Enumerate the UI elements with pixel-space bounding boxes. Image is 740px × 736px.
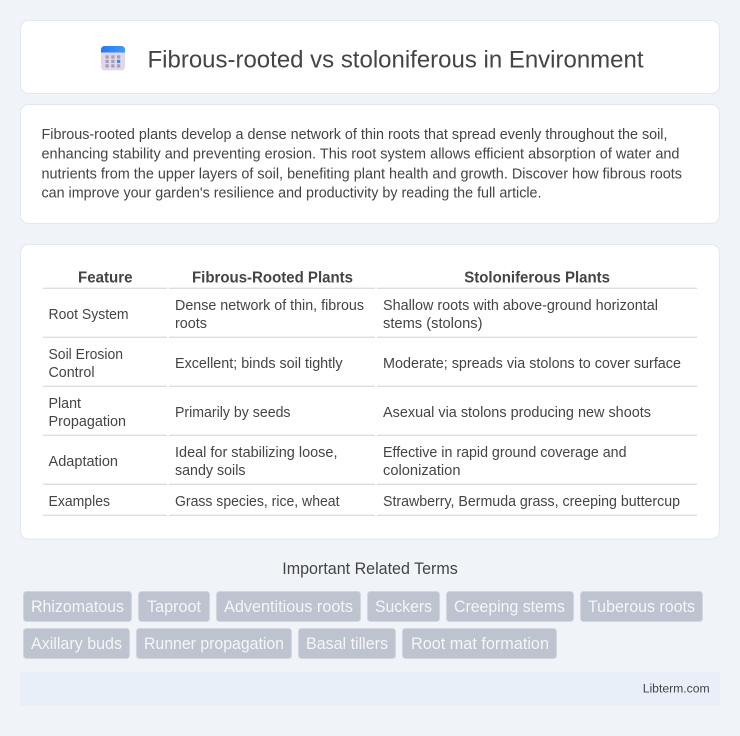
icon: calendar — [101, 46, 125, 70]
tag: Basal tillers: Basal tillers — [306, 635, 388, 653]
tag: Suckers: Suckers — [375, 598, 432, 616]
panel: header — [20, 20, 720, 94]
table header row — [78, 270, 610, 287]
tag: Runner propagation — [136, 628, 292, 658]
table header row: Fibrous-Rooted Plants — [192, 270, 353, 287]
tag: Suckers — [368, 592, 440, 622]
panel: introduction — [20, 104, 720, 224]
table header row: Feature — [78, 270, 133, 287]
table row: adaptation: colonization — [383, 463, 460, 479]
tag: Adventitious roots — [216, 592, 360, 622]
table row: root system: Root System — [48, 307, 128, 323]
table row: adaptation: sandy soils — [175, 463, 246, 479]
table header row: Stoloniferous Plants — [464, 270, 610, 287]
related term tags — [24, 592, 702, 658]
table row: adaptation — [48, 445, 626, 479]
tag: Creeping stems: Creeping stems — [454, 598, 565, 616]
title: Fibrous-rooted vs stoloniferous in Environment — [148, 46, 644, 73]
table row: examples: Examples — [48, 494, 110, 510]
table row: plant propagation: Primarily by seeds — [175, 405, 290, 421]
tag: Adventitious roots: Adventitious roots — [224, 598, 353, 616]
table row: soil erosion control: Moderate; spreads via stolons to cover surface — [383, 356, 681, 372]
tag: Rhizomatous: Rhizomatous — [31, 598, 124, 616]
text block: introduction paragraph: can improve your garden's resilience and productivity by reading the full article. — [42, 185, 542, 201]
tag: Runner propagation: Runner propagation — [144, 635, 284, 653]
table row: soil erosion control — [48, 347, 681, 381]
table row: examples: Grass species, rice, wheat — [175, 494, 340, 510]
table row: soil erosion control: Excellent; binds soil tightly — [175, 356, 343, 372]
heading: important related terms: Important Related Terms — [282, 560, 458, 578]
table row: plant propagation: Propagation — [48, 414, 126, 430]
table row: examples: Strawberry, Bermuda grass, creeping buttercup — [383, 494, 680, 510]
tag: Taproot — [138, 592, 210, 622]
table row: root system: Dense network of thin, fibrous — [175, 298, 364, 314]
tag: Axillary buds: Axillary buds — [31, 635, 122, 653]
tag: Root mat formation — [402, 628, 556, 658]
tag: Creeping stems — [446, 592, 574, 622]
table row: plant propagation: Plant — [48, 396, 81, 412]
table row: root system: roots — [175, 316, 207, 332]
table row: adaptation: Adaptation — [48, 454, 118, 470]
table row: soil erosion control: Soil Erosion — [48, 347, 123, 363]
tag: Taproot: Taproot — [147, 598, 201, 616]
text block: introduction paragraph — [42, 127, 682, 201]
tag: Tuberous roots — [580, 592, 702, 622]
table row: adaptation: Effective in rapid ground coverage and — [383, 445, 626, 461]
tag: Axillary buds — [24, 628, 130, 658]
tag: Rhizomatous — [24, 592, 132, 622]
text block: introduction paragraph: Fibrous-rooted plants develop a dense network of thin roots that spread evenly throughout the soil, — [42, 127, 668, 143]
tag: Root mat formation: Root mat formation — [411, 635, 549, 653]
panel: comparison table — [20, 244, 720, 539]
table row: root system: Shallow roots with above-ground horizontal — [383, 298, 658, 314]
text block: introduction paragraph: enhancing stability and preventing erosion. This root system allows efficient absorption of water and — [42, 146, 680, 162]
tag: Tuberous roots: Tuberous roots — [588, 598, 695, 616]
table row: adaptation: Ideal for stabilizing loose, — [175, 445, 338, 461]
table row: root system — [48, 298, 658, 332]
text block: introduction paragraph: nutrients from the upper layers of soil, benefiting plant health and growth. Discover how fibrous roots — [42, 166, 682, 182]
table row: root system: stems (stolons) — [383, 316, 482, 332]
table row: examples — [48, 494, 680, 510]
table row: plant propagation: Asexual via stolons producing new shoots — [383, 405, 651, 421]
footer bar — [20, 672, 720, 706]
tag: Basal tillers — [298, 628, 396, 658]
footer credit: Libterm.com — [643, 682, 710, 696]
table row: plant propagation — [48, 396, 651, 430]
table row: soil erosion control: Control — [48, 365, 94, 381]
